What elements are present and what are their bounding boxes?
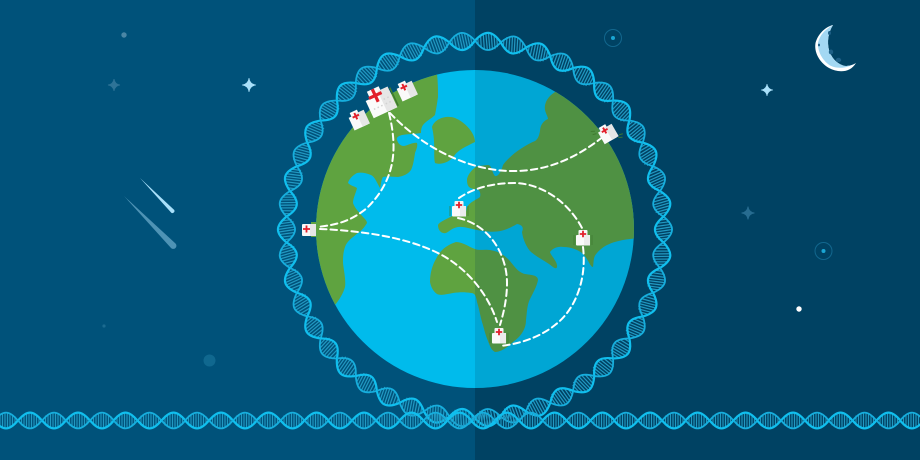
small shooting star bbox=[140, 178, 174, 213]
large shooting star bbox=[124, 196, 176, 249]
icon: small hospital left bbox=[347, 107, 370, 131]
background left panel bbox=[0, 0, 475, 460]
route: Europe kit to south Africa bbox=[458, 218, 507, 325]
land: North America bbox=[316, 74, 438, 305]
icon: South Africa kit bbox=[490, 328, 508, 344]
dashed connection routes bbox=[317, 113, 604, 346]
land: Africa bbox=[430, 242, 538, 352]
icon: east kit bbox=[591, 118, 624, 150]
faint dot lower left bbox=[102, 324, 106, 328]
icon: Europe kit bbox=[450, 201, 468, 216]
ring planet top bbox=[604, 30, 622, 46]
route: west kit to south Africa bbox=[320, 229, 497, 322]
icon: small hospital right bbox=[395, 78, 418, 102]
starfield bbox=[102, 30, 832, 366]
icon: main hospital bbox=[362, 82, 399, 118]
background right panel bbox=[475, 0, 920, 460]
land: Eurasia bbox=[438, 92, 634, 268]
icon: Asia kit bbox=[574, 230, 592, 246]
icon: west kit bbox=[302, 222, 316, 237]
faint large dot lower left bbox=[204, 354, 216, 366]
ocean bbox=[316, 70, 634, 388]
white dot right bbox=[796, 306, 802, 312]
DNA ring around globe bbox=[278, 32, 672, 427]
dim dot top left bbox=[121, 32, 127, 38]
dim star top left bbox=[108, 79, 120, 91]
bright star right bbox=[761, 84, 773, 96]
route: hospital to east kit bbox=[390, 113, 604, 171]
dim star right bbox=[742, 206, 754, 220]
ring planet right bbox=[815, 242, 832, 260]
horizontal DNA strand bbox=[0, 413, 920, 428]
bright star left bbox=[242, 78, 256, 92]
icon: shooting stars bbox=[124, 178, 176, 249]
route: Asia kit to south Africa bbox=[500, 247, 584, 346]
land: Greenland bbox=[432, 117, 475, 164]
globe bbox=[316, 70, 634, 388]
route: Europe kit to Asia kit bbox=[459, 183, 582, 228]
darker right hemisphere bbox=[475, 70, 634, 388]
route: hospital to west kit bbox=[317, 113, 394, 227]
icon: crescent moon bbox=[815, 25, 856, 71]
